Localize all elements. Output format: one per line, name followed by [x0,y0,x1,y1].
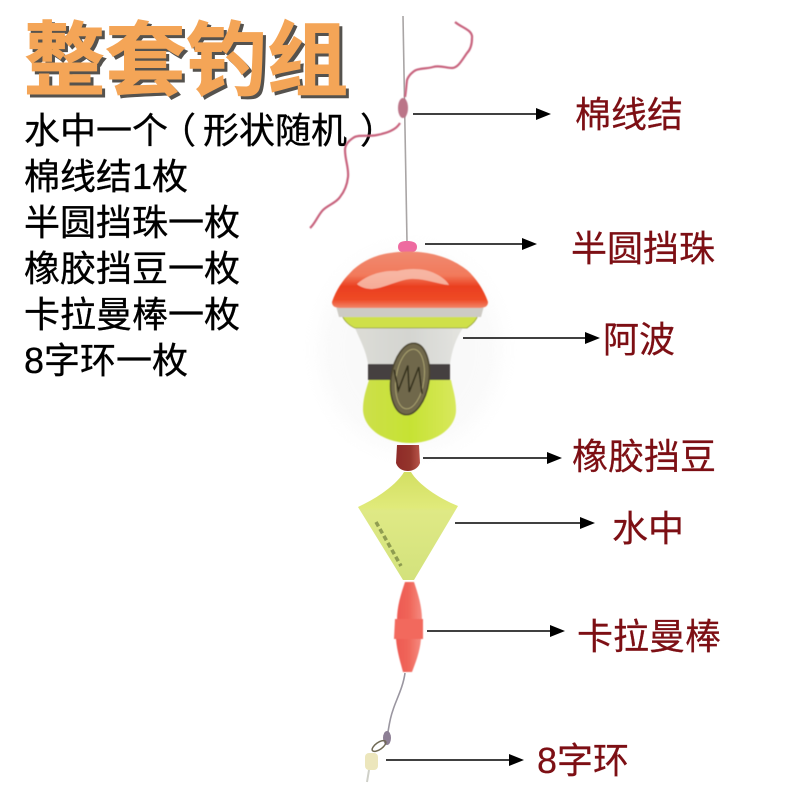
parts list: 棉线结1枚 [24,156,188,197]
parts list: 水中一个 [24,110,168,151]
callout: 橡胶挡豆 [423,436,716,477]
parts list: 8字环一枚 [24,340,188,381]
callout: 8字环: 8字环 [537,740,629,781]
water-mid cone [358,472,458,580]
callout: 阿波: 阿波 [603,319,675,360]
figure-8 swivel [365,731,391,782]
callout: 卡拉曼棒 [427,616,721,657]
float body [332,252,488,443]
cotton thread knot [310,22,472,228]
callout: 阿波 [463,319,675,360]
callout: 8字环 [386,740,629,781]
logo badge [386,341,434,417]
parts list: 橡胶挡豆一枚 [24,248,240,289]
callout: 水中: 水中 [612,508,684,549]
half-round stopper bead [398,241,417,253]
title: 整套钓组 [24,17,348,107]
caramel stick [394,582,423,672]
callout: 棉线结: 棉线结 [575,94,683,135]
faint halo [320,250,500,450]
parts list: ） [360,110,396,151]
rubber stopper [396,445,420,471]
callout: 棉线结 [413,94,683,135]
parts list [24,110,396,381]
callout: 半圆挡珠: 半圆挡珠 [571,228,715,269]
callout: 卡拉曼棒: 卡拉曼棒 [577,616,721,657]
parts list: 卡拉曼棒一枚 [24,294,240,335]
cap highlight [357,269,449,289]
lower line [388,673,405,732]
callout: 半圆挡珠 [425,228,715,269]
parts list: （ [160,110,196,151]
main line [403,16,407,242]
fishing rig illustration [310,16,500,782]
parts list: 半圆挡珠一枚 [24,202,240,243]
callout: 橡胶挡豆: 橡胶挡豆 [572,436,716,477]
title: 整套钓组 [27,20,351,110]
parts list: 形状随机 [203,110,347,151]
callout: 水中 [455,508,684,549]
